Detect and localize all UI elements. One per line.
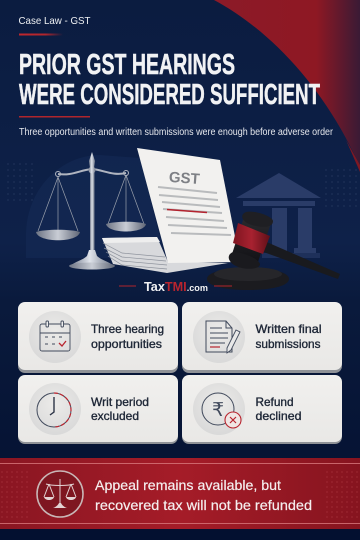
banner text: Appeal remains available, but [95,477,281,493]
card: refund declined [182,375,342,444]
icon: document and pen [193,311,245,363]
icon: balance scale [36,152,146,270]
icon: courthouse [236,173,321,258]
icon: clock [29,383,81,435]
hero illustration [26,148,340,290]
title rule [19,116,90,118]
label: Refund [256,395,294,409]
icon: gavel [207,212,340,290]
title: PRIOR GST HEARINGS [19,49,235,81]
card: three hearing opportunities [18,302,178,373]
icon: rupee with cross: ₹ [212,399,224,421]
logo: TaxTMI.com: TaxTMI.com [144,280,208,294]
label: excluded [91,409,139,423]
label [91,322,164,351]
accent rule [19,34,63,36]
document: GST: GST [168,169,200,188]
footer banner [0,458,360,529]
card: written final submissions [182,302,342,373]
backdrop arch [26,155,165,258]
logo: TaxTMI.com [119,280,232,294]
banner text: recovered tax will not be refunded [95,497,312,513]
label: Three hearing [91,322,164,336]
label: declined [256,409,302,423]
label: opportunities [91,337,162,351]
icon: scale badge [37,471,83,517]
label: Writ period [91,395,149,409]
icon: paper stack [102,237,228,273]
icon: calendar [29,311,81,363]
card: writ period excluded [18,375,178,444]
label [91,395,149,423]
label: Written final [256,322,322,336]
document: GST [137,148,240,263]
eyebrow: case law label: Case Law - GST [18,15,91,27]
label: submissions [256,337,320,351]
title [19,49,320,111]
label [256,395,302,423]
label [256,322,322,351]
icon: rupee with cross [193,383,245,435]
